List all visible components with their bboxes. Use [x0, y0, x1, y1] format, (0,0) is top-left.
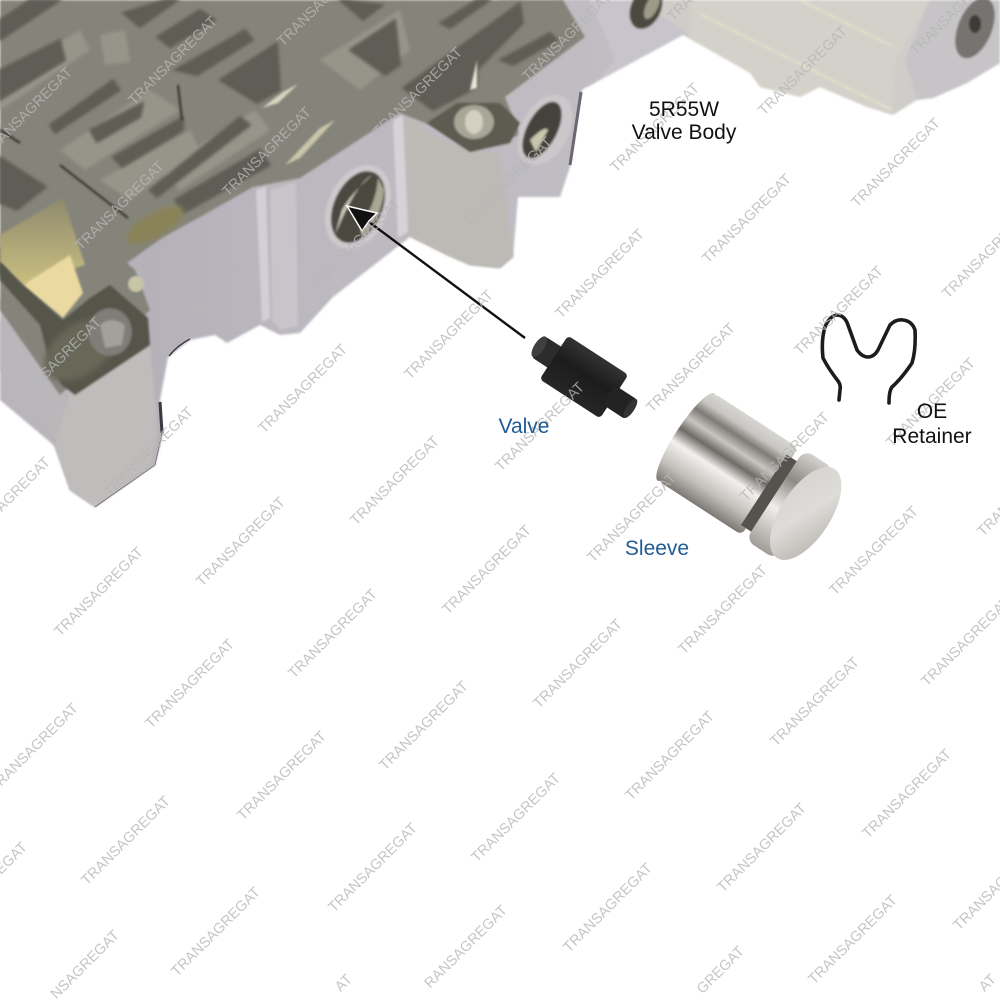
OE retainer clip — [822, 315, 915, 403]
watermark pattern: TRANSAGREGAT — [347, 433, 443, 529]
second bore — [506, 85, 584, 175]
label: 5R55W valve body: Valve Body — [632, 121, 737, 144]
watermark pattern: RANSAGREGAT — [422, 902, 511, 992]
mounting pad lower left — [0, 262, 150, 395]
yellow lit pocket — [0, 198, 85, 285]
watermark pattern: TRANSAGREGAT — [234, 728, 330, 824]
olive stain — [121, 199, 189, 251]
watermark pattern: TRANSAGREGAT — [883, 355, 979, 451]
watermark pattern: TRANSAGREGAT — [125, 13, 221, 109]
watermark pattern: TRANSAGREGAT — [193, 494, 289, 590]
arrow pointing to bore — [347, 206, 525, 338]
hole at top centre — [623, 0, 669, 34]
watermark pattern: TRANSAGREGAT — [560, 860, 656, 956]
watermark pattern: TRANSAGREGAT — [643, 320, 739, 416]
dark shadow strips on casting edges — [95, 92, 581, 507]
watermark pattern: TRANSAGREGAT — [859, 746, 955, 842]
watermark pattern: TRANSAGREGAT — [308, 196, 404, 292]
lighter raised ribs — [0, 10, 410, 200]
main bore — [312, 154, 404, 260]
plug in right hole — [947, 0, 1000, 64]
watermark pattern: TRANSAGREGAT — [168, 884, 264, 980]
watermark pattern: TRANSAGREGAT — [848, 115, 944, 211]
lit areas on side face — [0, 115, 513, 507]
watermark pattern: TRANSAGREGAT — [755, 23, 851, 119]
watermark pattern: TRANSAGREGAT — [826, 503, 922, 599]
watermark pattern: TRANSAGREGAT — [530, 616, 626, 712]
watermark pattern: AT — [332, 971, 356, 995]
pad bolt hole — [88, 308, 132, 356]
side face of valve body — [0, 0, 615, 507]
label: OE retainer: Retainer — [892, 425, 972, 448]
watermark pattern: TRANSAGREGAT — [376, 678, 472, 774]
cap face — [756, 455, 856, 572]
label: OE retainer: OE — [917, 400, 947, 423]
watermark pattern: TRANSAGREGAT — [675, 562, 771, 658]
groove — [741, 455, 800, 534]
watermark pattern: TRANSAGREGAT — [325, 820, 421, 916]
watermark pattern: TRANSAGREGAT — [584, 470, 680, 566]
watermark pattern: TRANSAGREGAT — [791, 263, 887, 359]
dark crease lines — [0, 85, 182, 218]
bolt pad — [427, 103, 520, 152]
watermark pattern: GREGAT — [694, 943, 748, 997]
top surface of valve body — [0, 0, 585, 395]
watermark pattern: TRANSAGREGAT — [468, 770, 564, 866]
watermark pattern: TRANSAGREGAT — [401, 287, 497, 383]
sleeve back end — [649, 387, 724, 487]
watermark pattern: TRANSAGREGAT — [622, 708, 718, 804]
watermark pattern: TRANSAGREGAT — [285, 586, 381, 682]
valve part — [520, 323, 648, 431]
watermark pattern: TRANSAGREGAT — [607, 80, 703, 176]
watermark pattern: TRANSAGREGAT — [737, 409, 833, 505]
label: sleeve: Sleeve — [625, 537, 689, 560]
watermark pattern: TRANSAGREGAT — [714, 800, 810, 896]
watermark pattern: TRANSAGREGAT — [805, 892, 901, 988]
watermark pattern: TRANSAGREGAT — [460, 134, 556, 230]
sleeve part — [647, 386, 856, 573]
watermark pattern: TRANSAGREGAT — [51, 544, 147, 640]
small screw — [128, 276, 144, 292]
right part of valve body casting — [560, 0, 1000, 115]
watermark pattern: TRANSAGREGAT — [163, 249, 259, 345]
watermark pattern: TRANSAGREGAT — [142, 636, 238, 732]
cap — [746, 449, 835, 560]
watermark pattern: TRANSAGREGAT — [552, 226, 648, 322]
label: valve: Valve — [499, 415, 549, 438]
watermark pattern: TRANSAGREGAT — [219, 104, 315, 200]
bright specular streaks — [262, 60, 477, 165]
recessed pockets — [0, 0, 557, 275]
watermark pattern: TRANSAGREGAT — [492, 379, 588, 475]
watermark pattern: TRANSAGREGAT — [9, 314, 105, 410]
sleeve body — [658, 393, 798, 535]
valve body photo — [0, 0, 1000, 507]
label: 5R55W valve body: 5R55W — [649, 98, 719, 121]
watermark pattern: TRANSAGREGAT — [767, 654, 863, 750]
watermark pattern: TRANSAGREGAT — [101, 404, 197, 500]
watermark pattern: TRANSAGREGAT — [255, 341, 351, 437]
watermark pattern: TRANSAGREGAT — [78, 793, 174, 889]
watermark pattern: TRANSAGREGAT — [370, 44, 466, 140]
watermark pattern: AT — [976, 971, 1000, 995]
watermark pattern: TRANSAGREGAT — [439, 522, 535, 618]
watermark pattern: TRANSAGREGAT — [699, 171, 795, 267]
watermark pattern: TRANSAGREGAT — [72, 158, 168, 254]
